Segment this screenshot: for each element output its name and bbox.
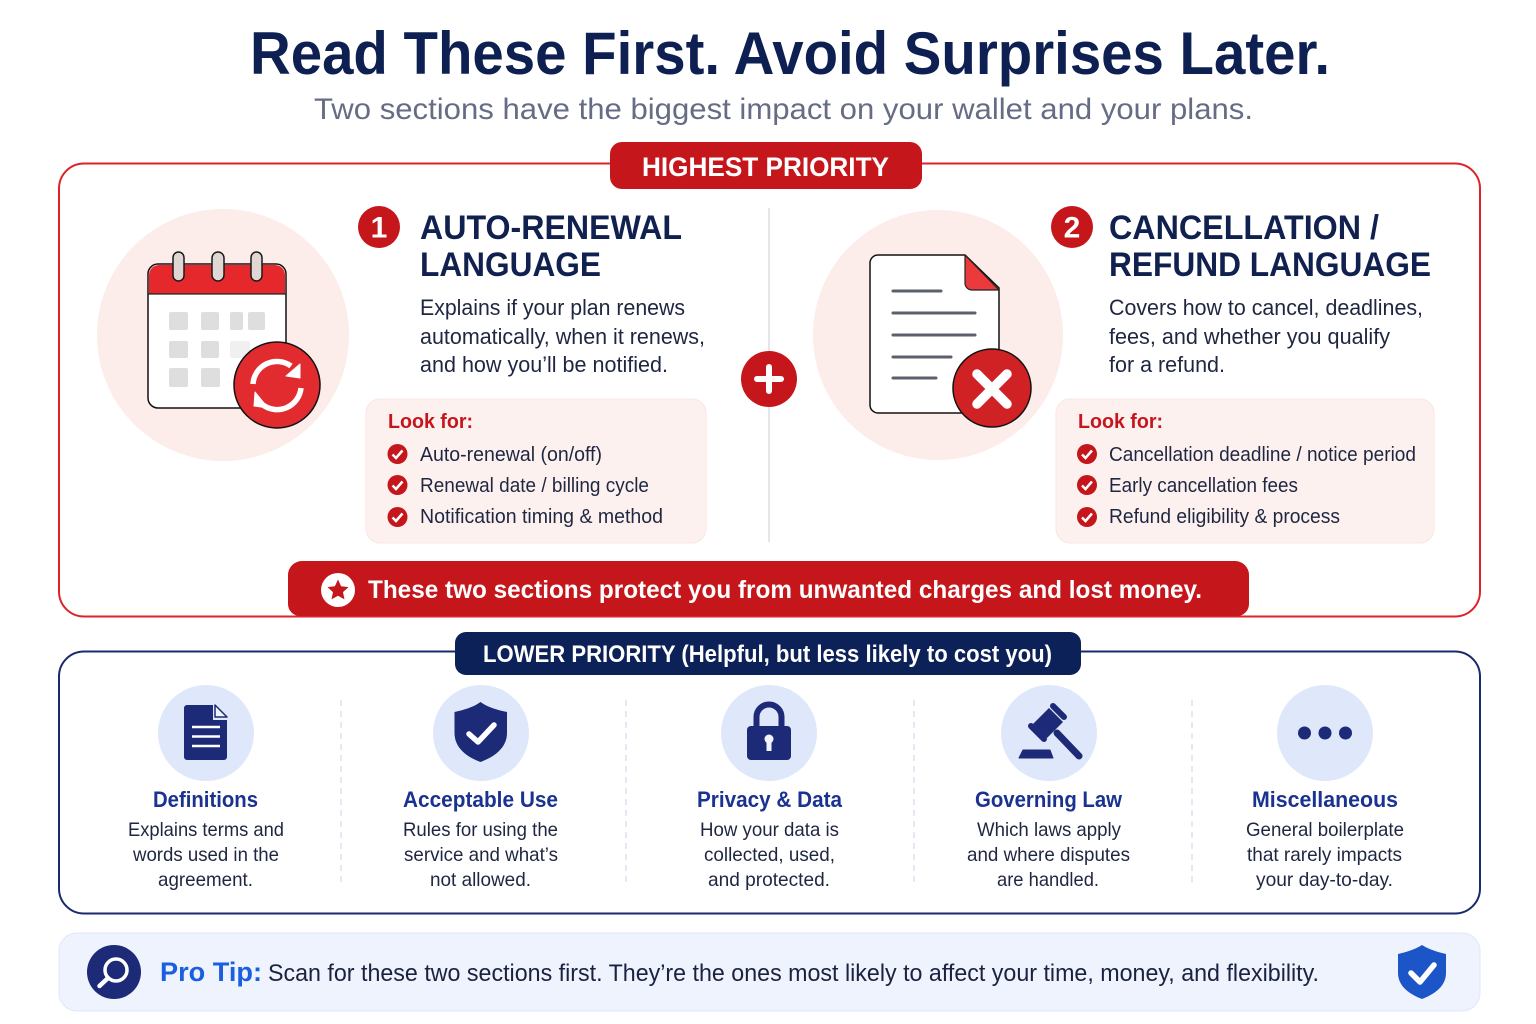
callout: look for, auto-renewal: Auto-renewal (on/off) [420,444,602,466]
text: cancellation description: Covers how to cancel, deadlines, [1109,295,1423,320]
text: auto-renewal description [420,295,705,377]
text: pro tip body: Scan for these two sections first. They’re the ones most likely to affect your time, money, and flexibility. [268,960,1319,987]
callout: look for, auto-renewal [366,399,706,543]
item: definitions [128,685,284,891]
divider with plus icon [741,208,797,542]
badge: number 1: 1 [371,212,387,244]
title: Read These First. Avoid Surprises Later. [250,20,1330,87]
callout: look for, auto-renewal: Notification timing & method [420,506,663,528]
item: governing law: Governing Law [975,787,1123,812]
badge: highest priority: HIGHEST PRIORITY [642,152,889,182]
item: definitions: words used in the [132,844,279,866]
text: cancellation description: for a refund. [1109,352,1225,377]
heading: cancellation / refund language: REFUND LANGUAGE [1109,246,1431,284]
callout: look for, cancellation: Early cancellation fees [1109,475,1298,497]
banner: protect you from charges [288,561,1249,616]
item: privacy and data [697,685,843,891]
item: definitions: agreement. [158,869,253,891]
item: privacy and data: and protected. [708,869,830,891]
item: miscellaneous: General boilerplate [1246,819,1404,841]
item: privacy and data: How your data is [700,819,839,841]
icon: document with X [813,210,1063,460]
item: privacy and data: Privacy & Data [697,787,843,812]
callout: look for, cancellation: Look for: [1078,411,1163,433]
item: miscellaneous: your day-to-day. [1256,869,1393,891]
item: miscellaneous: Miscellaneous [1252,787,1398,812]
badge: number 2: 2 [1064,212,1080,244]
item: definitions: Definitions [153,787,258,812]
heading: cancellation / refund language: CANCELLATION / [1109,209,1380,247]
item: governing law: and where disputes [967,844,1130,866]
callout: look for, cancellation: Cancellation deadline / notice period [1109,444,1416,466]
icon: gavel [1001,685,1097,781]
callout: look for, auto-renewal: Look for: [388,411,473,433]
icon: magnifying glass [87,945,141,999]
badge: number 1 [358,206,400,248]
text: auto-renewal description: automatically, when it renews, [420,324,705,349]
item: acceptable use: service and what’s [404,844,558,866]
badge: lower priority [455,632,1081,675]
heading: auto-renewal language [420,209,682,284]
item: governing law: Which laws apply [977,819,1121,841]
badge: highest priority [610,142,922,189]
panel: pro tip [59,933,1480,1011]
text: auto-renewal description: and how you’ll be notified. [420,352,668,377]
badge: lower priority: LOWER PRIORITY (Helpful, but less likely to cost you) [483,641,1052,668]
text: cancellation description [1109,295,1423,377]
text: pro tip label: Pro Tip: [160,957,262,987]
item: miscellaneous: that rarely impacts [1247,844,1402,866]
heading: auto-renewal language: AUTO-RENEWAL [420,209,682,247]
icon: document [158,685,254,781]
icon: three dots [1277,685,1373,781]
item: acceptable use [403,685,558,891]
item: governing law: are handled. [997,869,1099,891]
callout: look for, cancellation [1056,399,1434,543]
callout: look for, auto-renewal: Renewal date / billing cycle [420,475,649,497]
item: acceptable use: not allowed. [430,869,531,891]
icon: calendar with renewal arrows [97,209,349,461]
badge: number 2 [1051,206,1093,248]
text: cancellation description: fees, and whether you qualify [1109,324,1391,349]
panel: lower priority [59,632,1480,914]
text: auto-renewal description: Explains if your plan renews [420,295,685,320]
icon: shield check [1398,945,1446,999]
item: governing law [967,685,1130,891]
item: acceptable use: Acceptable Use [403,787,558,812]
banner: protect you from charges: These two sections protect you from unwanted charges and lost money. [368,576,1202,604]
item: acceptable use: Rules for using the [403,819,558,841]
subtitle: Two sections have the biggest impact on your wallet and your plans. [314,93,1253,126]
callout: look for, cancellation: Refund eligibility & process [1109,506,1340,528]
heading: auto-renewal language: LANGUAGE [420,246,601,284]
item: privacy and data: collected, used, [704,844,835,866]
icon: padlock [721,685,817,781]
item: miscellaneous [1246,685,1404,891]
panel: highest priority [59,142,1480,616]
item: definitions: Explains terms and [128,819,284,841]
icon: shield with check [433,685,529,781]
heading: cancellation / refund language [1109,209,1431,284]
